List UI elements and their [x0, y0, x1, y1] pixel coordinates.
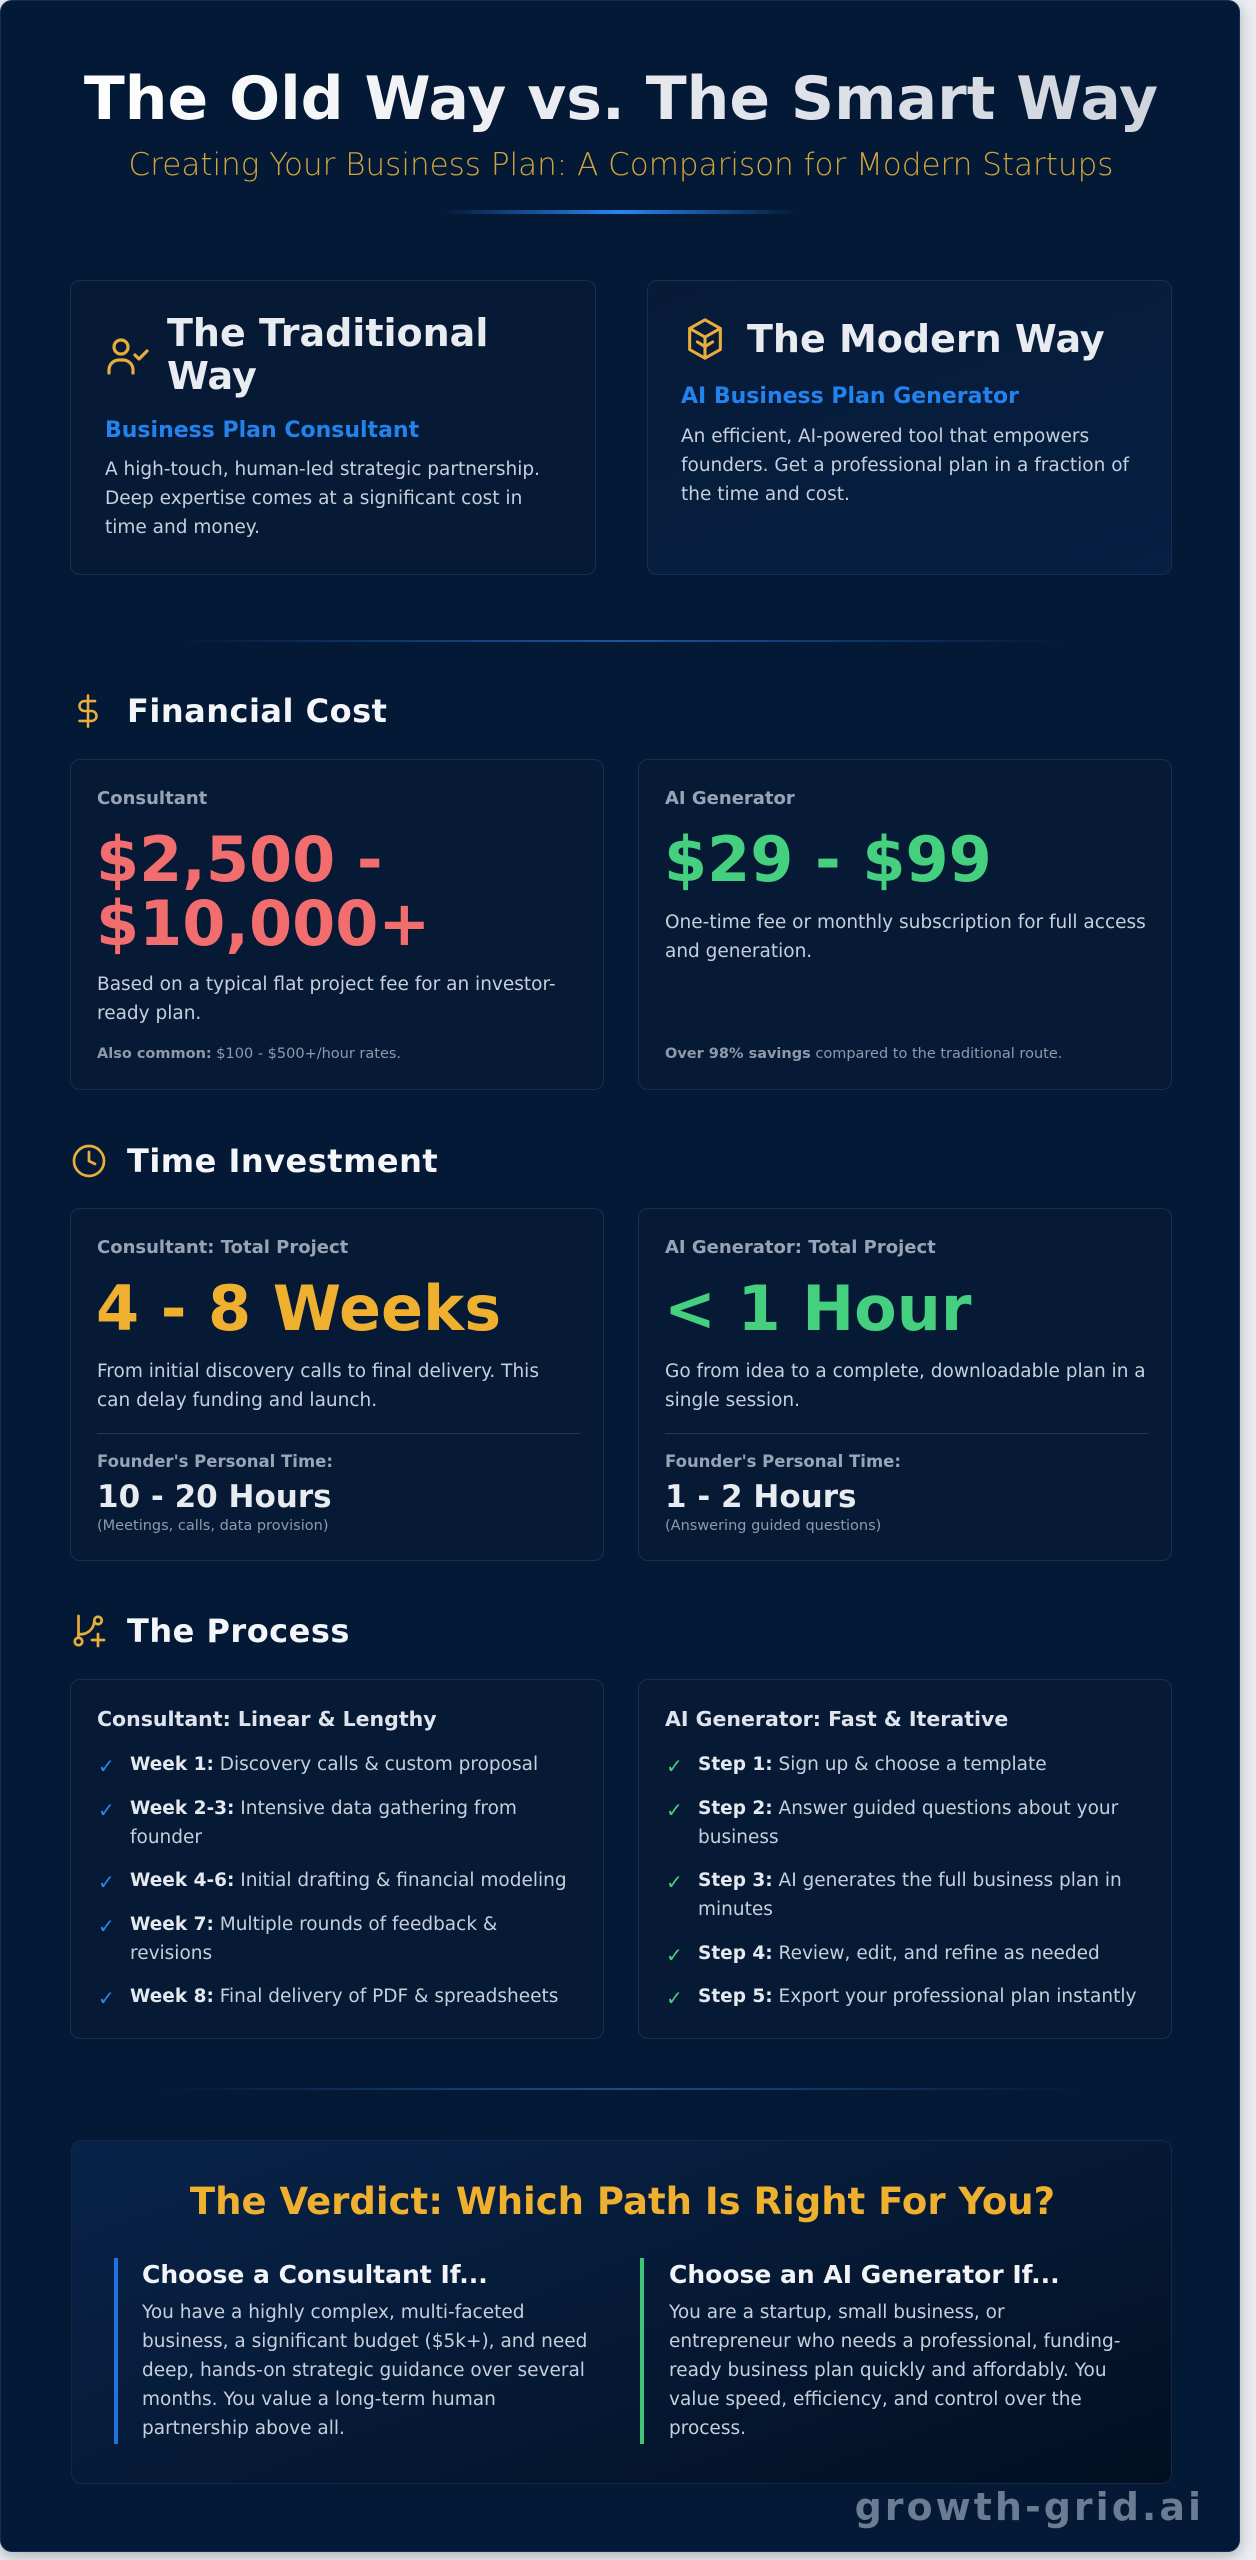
panel: consultant time: [70, 1208, 604, 1561]
text: cost basis: Based on a typical flat project fee for an investor-: [97, 974, 556, 995]
icon: git branch: [73, 1614, 106, 1648]
panel: consultant process: ✓: [98, 1914, 115, 1938]
panel: AI time: [638, 1208, 1172, 1561]
heading: Consultant: Linear & Lengthy: [97, 1707, 437, 1731]
column: AI generator: You are a startup, small business, or: [669, 2302, 1005, 2323]
section heading: the process: The Process: [127, 1612, 350, 1650]
heading: verdict: The Verdict: Which Path Is Right For You?: [190, 2180, 1055, 2223]
column: consultant: [114, 2258, 594, 2444]
icon: dollar: [78, 694, 98, 728]
list: AI steps: Step 4: Review, edit, and refine as needed: [698, 1942, 1100, 1964]
column: consultant: months. You value a long-term human: [142, 2389, 496, 2410]
text: traditional description: A high-touch, human-led strategic partnership.: [105, 459, 540, 480]
title: The Old Way vs. The Smart Way: [84, 64, 1158, 134]
text: time description: can delay funding and launch.: [97, 1390, 377, 1411]
text: traditional description: Deep expertise comes at a significant cost in: [105, 488, 522, 509]
column: AI generator: entrepreneur who needs a professional, funding-: [669, 2331, 1120, 2352]
note: Over 98% savings compared to the traditional route.: [665, 1046, 1062, 1062]
text: modern description: the time and cost.: [681, 484, 850, 505]
column: AI generator: process.: [669, 2418, 746, 2439]
list: consultant steps: Week 7: Multiple rounds of feedback & revisions: [130, 1914, 497, 1964]
heading: traditional: The Traditional: [167, 311, 488, 355]
note: Also common: $100 - $500+/hour rates.: [97, 1046, 401, 1062]
text: modern description: [681, 426, 1130, 505]
column: consultant: partnership above all.: [142, 2418, 345, 2439]
column: consultant: You have a highly complex, multi-faceted: [142, 2302, 524, 2323]
text: time description: [97, 1361, 539, 1411]
founder time: 1 - 2 Hours: [665, 1479, 856, 1515]
text: modern description: founders. Get a professional plan in a fraction of: [681, 455, 1129, 476]
panel: consultant cost: [70, 759, 604, 1090]
text: time description: Go from idea to a complete, downloadable plan in a: [665, 1361, 1146, 1382]
text: time description: From initial discovery calls to final delivery. This: [97, 1361, 539, 1382]
panel: consultant process: ✓: [98, 1754, 115, 1778]
list: consultant steps: Week 1: Discovery calls & custom proposal: [130, 1754, 538, 1775]
subheading: AI generator: AI Business Plan Generator: [681, 384, 1019, 409]
panel: AI process: ✓: [666, 1870, 683, 1894]
panel: consultant process: ✓: [98, 1798, 115, 1822]
list: consultant steps: Week 2-3: Intensive data gathering from founder: [130, 1798, 517, 1848]
list: AI steps: [666, 1754, 1136, 2010]
number: weeks: 4 - 8 Weeks: [96, 1272, 501, 1345]
icon: clock: [72, 1144, 106, 1178]
text: time description: single session.: [665, 1390, 800, 1411]
watermark: growth-grid.ai: [855, 2485, 1204, 2529]
founder time: Founder's Personal Time:: [665, 1452, 901, 1471]
founder time: (Meetings, calls, data provision): [97, 1518, 328, 1534]
number: consultant price: $2,500 -: [96, 823, 383, 896]
text: AI pricing: and generation.: [665, 941, 812, 962]
panel: traditional way: [70, 280, 596, 575]
label: AI Generator: [665, 788, 795, 809]
column: AI generator: [640, 2258, 1130, 2444]
list: AI steps: Step 5: Export your professional plan instantly: [698, 1986, 1136, 2007]
founder time: 10 - 20 Hours: [97, 1479, 332, 1515]
panel: consultant process: ✓: [98, 1986, 115, 2010]
text: cost basis: [97, 974, 556, 1024]
text: AI pricing: One-time fee or monthly subscription for full access: [665, 912, 1146, 933]
heading: traditional: [167, 311, 488, 398]
panel: AI cost: [638, 759, 1172, 1090]
number: consultant price: $10,000+: [96, 887, 430, 960]
panel: consultant process: [70, 1679, 604, 2039]
list: consultant steps: Week 8: Final delivery of PDF & spreadsheets: [130, 1986, 558, 2007]
title underline: [442, 210, 798, 214]
founder time: (Answering guided questions): [665, 1518, 881, 1534]
column: AI generator: Choose an AI Generator If...: [669, 2260, 1060, 2289]
number: hour: < 1 Hour: [664, 1272, 971, 1345]
column: consultant: Choose a Consultant If...: [142, 2260, 488, 2289]
panel: AI process: ✓: [666, 1986, 683, 2010]
text: time description: [665, 1361, 1146, 1411]
text: cost basis: ready plan.: [97, 1003, 201, 1024]
text: modern description: An efficient, AI-powered tool that empowers: [681, 426, 1089, 447]
column: AI generator: ready business plan quickly and affordably. You: [669, 2360, 1107, 2381]
icon: person check: [107, 338, 149, 375]
text: AI pricing: [665, 912, 1146, 962]
column: AI generator: value speed, efficiency, and control over the: [669, 2389, 1082, 2410]
list: consultant steps: [98, 1754, 567, 2010]
label: AI Generator: Total Project: [665, 1237, 936, 1258]
founder time: [97, 1452, 333, 1534]
panel: modern way: [647, 280, 1172, 575]
text: traditional description: time and money.: [105, 517, 260, 538]
heading: traditional: Way: [167, 354, 257, 398]
panel: AI process: [638, 1679, 1172, 2039]
heading: AI Generator: Fast & Iterative: [665, 1707, 1008, 1731]
panel: AI process: ✓: [666, 1754, 683, 1778]
column: consultant: deep, hands-on strategic guidance over several: [142, 2360, 585, 2381]
panel: AI process: ✓: [666, 1798, 683, 1822]
label: Consultant: [97, 788, 207, 809]
text: traditional description: [105, 459, 540, 538]
subheading: consultant: Business Plan Consultant: [105, 418, 419, 443]
section heading: time investment: Time Investment: [127, 1142, 438, 1180]
list: AI steps: Step 1: Sign up & choose a template: [698, 1754, 1047, 1775]
column: consultant: business, a significant budget ($5k+), and need: [142, 2331, 587, 2352]
panel: consultant process: ✓: [98, 1870, 115, 1894]
number: AI price: $29 - $99: [664, 823, 992, 896]
list: AI steps: Step 3: AI generates the full business plan in minutes: [698, 1870, 1122, 1920]
section heading: financial cost: Financial Cost: [127, 692, 387, 730]
list: consultant steps: Week 4-6: Initial drafting & financial modeling: [130, 1870, 567, 1891]
heading: modern: The Modern Way: [747, 317, 1105, 361]
list: AI steps: Step 2: Answer guided questions about your business: [698, 1798, 1118, 1848]
number: consultant price: [96, 823, 430, 960]
panel: AI process: ✓: [666, 1942, 683, 1966]
icon: box: [688, 318, 722, 360]
label: Consultant: Total Project: [97, 1237, 348, 1258]
founder time: [665, 1452, 901, 1534]
founder time: Founder's Personal Time:: [97, 1452, 333, 1471]
panel: verdict: [71, 2140, 1172, 2484]
subtitle: Creating Your Business Plan: A Comparison for Modern Startups: [129, 147, 1113, 183]
